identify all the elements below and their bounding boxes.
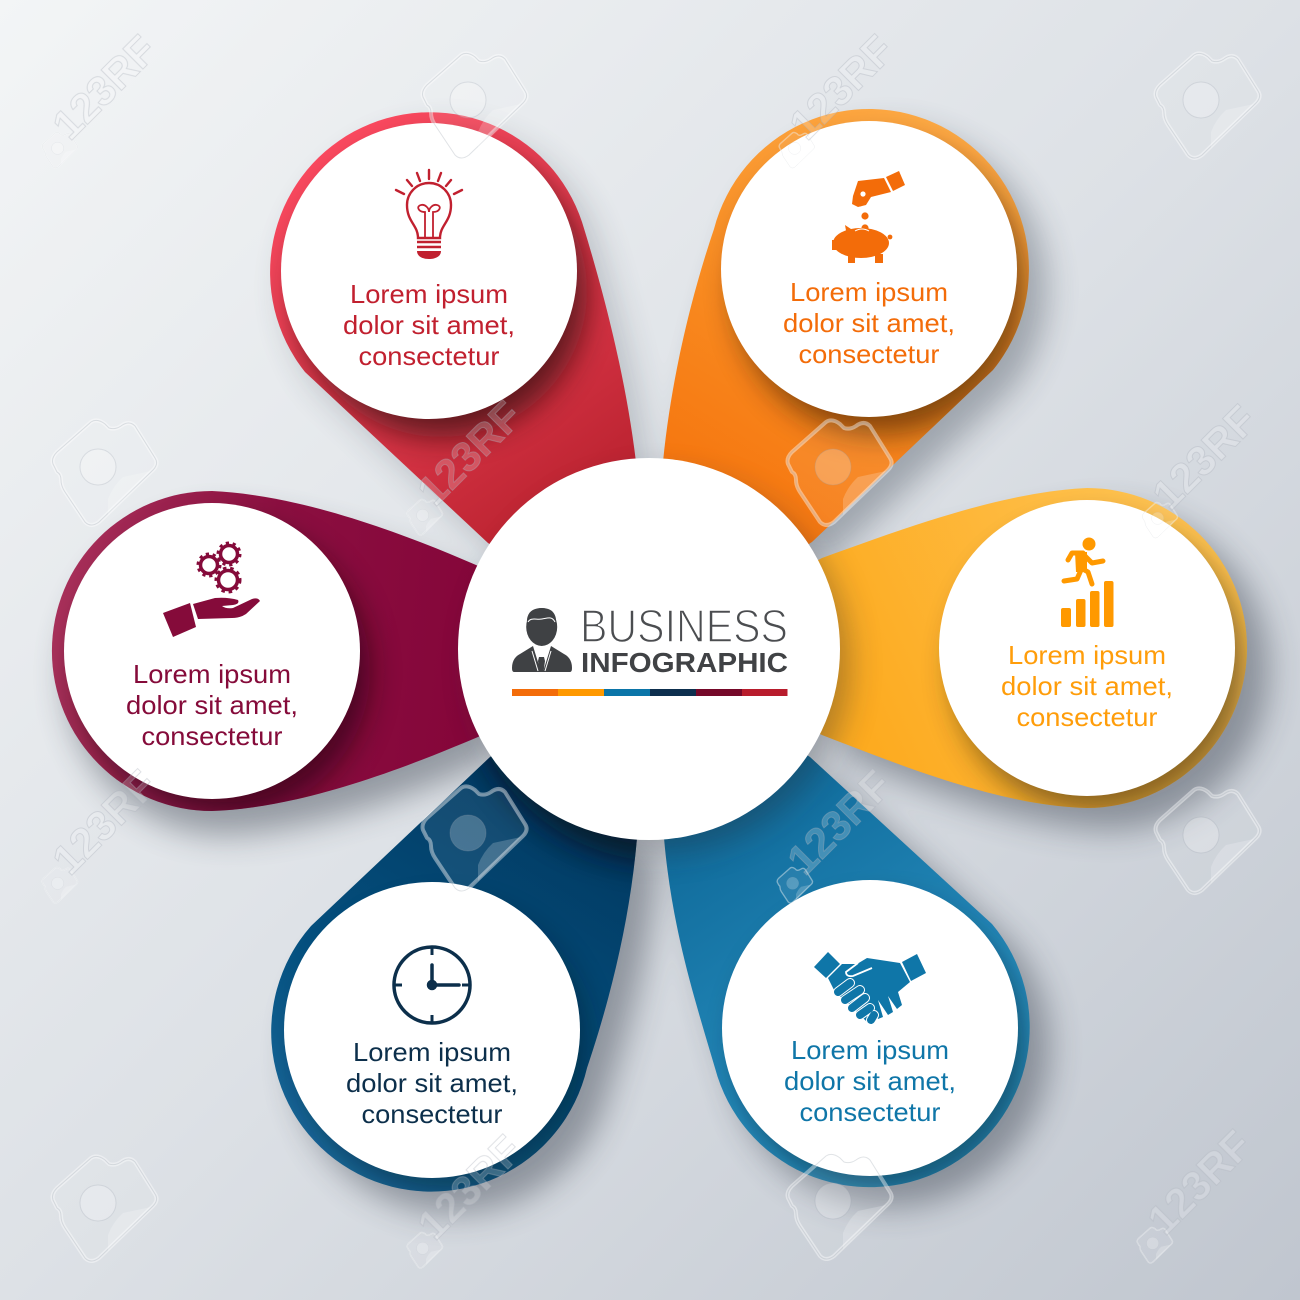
watermark stamps and text: 123RF xyxy=(43,26,166,148)
circle shadow on petal xyxy=(298,904,590,1196)
icon: businessman xyxy=(512,608,572,672)
center disc xyxy=(458,458,840,840)
panel: piggy bank petal (orange) xyxy=(649,109,1029,649)
text: lorem navy: Lorem ipsum xyxy=(353,1037,511,1067)
text: lorem navy xyxy=(346,1037,518,1129)
panel: clock petal (navy) xyxy=(271,471,857,1196)
text: lorem red: Lorem ipsum xyxy=(350,279,508,309)
text: lorem blue xyxy=(784,1035,956,1127)
icon: hand with gears xyxy=(163,543,260,637)
circle shadow on petal xyxy=(736,902,1028,1194)
colour bar xyxy=(512,689,788,696)
panel: gears petal (maroon) xyxy=(52,491,649,817)
title: business: BUSINESS xyxy=(580,600,788,652)
icon: piggy bank and hand xyxy=(832,171,905,263)
white disc xyxy=(722,880,1018,1176)
text: lorem yellow: consectetur xyxy=(1016,702,1158,732)
text: lorem red: dolor sit amet, xyxy=(343,310,515,340)
petal shape xyxy=(649,109,1029,649)
center disc soft shadow xyxy=(474,476,850,852)
watermark stamps and text: 123RF xyxy=(1143,396,1266,518)
white disc xyxy=(721,121,1017,417)
text: lorem navy: dolor sit amet, xyxy=(346,1068,518,1098)
petal shape xyxy=(270,112,649,649)
panel: runner petal (yellow) xyxy=(649,488,1247,814)
icon: handshake xyxy=(814,952,926,1023)
white disc xyxy=(64,503,360,799)
circle shadow on petal xyxy=(735,143,1027,435)
text: lorem blue: dolor sit amet, xyxy=(784,1066,956,1096)
icon: clock xyxy=(394,947,470,1023)
petal shape xyxy=(52,491,649,811)
white disc xyxy=(939,500,1235,796)
white disc xyxy=(281,123,577,419)
panel: center circle xyxy=(458,458,840,840)
text: lorem orange: dolor sit amet, xyxy=(783,308,955,338)
panel: lightbulb petal (red) xyxy=(270,112,636,544)
text: lorem navy: consectetur xyxy=(362,1099,503,1129)
panel: handshake petal (blue) xyxy=(649,649,1030,1194)
text: lorem maroon: dolor sit amet, xyxy=(126,690,298,720)
text: lorem orange: Lorem ipsum xyxy=(790,277,948,307)
watermark stamps and text: 123RF xyxy=(43,761,166,883)
watermark stamps and text: 123RF xyxy=(778,761,901,883)
petal shape xyxy=(649,649,1030,1187)
text: lorem orange xyxy=(783,277,955,369)
text: lorem blue: consectetur xyxy=(800,1097,941,1127)
circle shadow on petal xyxy=(295,145,587,437)
circle shadow on petal xyxy=(78,525,370,817)
text: lorem maroon: Lorem ipsum xyxy=(133,659,291,689)
text: lorem yellow: Lorem ipsum xyxy=(1008,640,1166,670)
text: lorem yellow xyxy=(1001,640,1173,732)
white disc xyxy=(284,882,580,1178)
text: lorem yellow: dolor sit amet, xyxy=(1001,671,1173,701)
center disc shadow on petal xyxy=(476,756,637,877)
petal shape xyxy=(271,649,649,1192)
title: infographic: INFOGRAPHIC xyxy=(581,647,788,678)
text: lorem maroon xyxy=(126,659,298,751)
text: lorem blue: Lorem ipsum xyxy=(791,1035,949,1065)
watermark stamps and text: 123RF xyxy=(408,392,531,514)
text: lorem red xyxy=(343,279,515,371)
watermark stamps and text: 123RF xyxy=(408,1126,531,1248)
watermark stamps and text: 123RF xyxy=(780,26,903,148)
text: lorem maroon: consectetur xyxy=(142,721,283,751)
petal shape xyxy=(649,488,1247,808)
icon: runner on bars xyxy=(1061,538,1114,627)
text: lorem red: consectetur xyxy=(358,341,500,371)
watermark stamps and text: 123RF xyxy=(1138,1121,1261,1243)
icon: lightbulb xyxy=(396,170,462,259)
petal cast shadows xyxy=(66,128,1269,1214)
text: lorem orange: consectetur xyxy=(798,339,940,369)
circle shadow on petal xyxy=(953,522,1245,814)
